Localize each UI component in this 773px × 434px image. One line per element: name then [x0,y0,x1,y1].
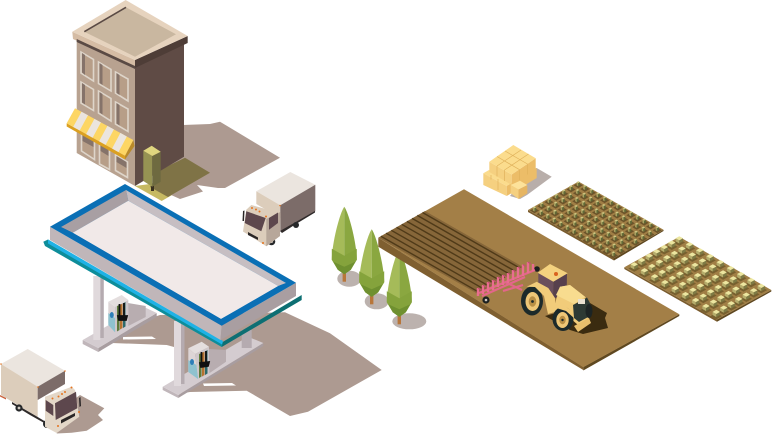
windows [81,52,128,178]
left pillar and base [83,276,157,352]
wheels [293,222,299,228]
ploughed field [378,189,679,370]
cab [243,205,280,246]
left wall [77,38,135,186]
delivery truck bottom left [0,349,104,434]
small bale [511,185,518,199]
delivery truck top right [242,172,315,246]
canopy underside strip [221,295,302,347]
field sides [378,238,583,370]
hay bales [483,145,552,199]
tree 3 [387,249,426,329]
lower layer [483,170,512,186]
right pillar and base [163,321,263,398]
front fender [553,303,574,318]
canopy blue frame [50,184,296,326]
cargo box [256,172,315,205]
truck shadow [57,395,104,434]
building with shop [67,0,280,201]
tractor [521,264,592,332]
furrows [378,211,523,294]
fuel pump 1 [108,295,146,332]
canopy fascia [50,227,222,340]
tree 2 [359,229,389,309]
orange lights [0,363,80,427]
cab [45,387,79,433]
yellow bin [143,146,161,191]
cab [538,272,553,300]
roof [72,0,188,69]
crop plot large plants [624,236,771,322]
tree 1 [332,207,361,287]
upper layer [489,162,512,185]
building shadow [160,122,280,199]
crop plot small seedlings [528,181,664,260]
fuel pump 2 [188,342,226,379]
tractor shadow [545,303,608,334]
seedlings [530,181,662,258]
trees [332,207,426,329]
orange lights [251,205,281,244]
front wheel [552,307,574,331]
canopy roof [43,184,302,347]
bale seams [491,150,528,194]
awning [67,108,134,160]
right wall [135,38,184,186]
pink cultivator [478,262,540,304]
hood [553,285,590,327]
canopy top surface [73,201,278,319]
canopy shadow [112,312,382,416]
gas station [43,184,382,416]
hay shadow [510,168,552,199]
plants [628,236,767,319]
field surface [378,189,679,367]
wheels [15,404,23,412]
yellow ground light patch [135,184,172,201]
canopy inner walls [61,190,128,233]
rear fender [527,282,555,314]
cargo box [1,349,65,387]
rear wheel [521,286,543,316]
